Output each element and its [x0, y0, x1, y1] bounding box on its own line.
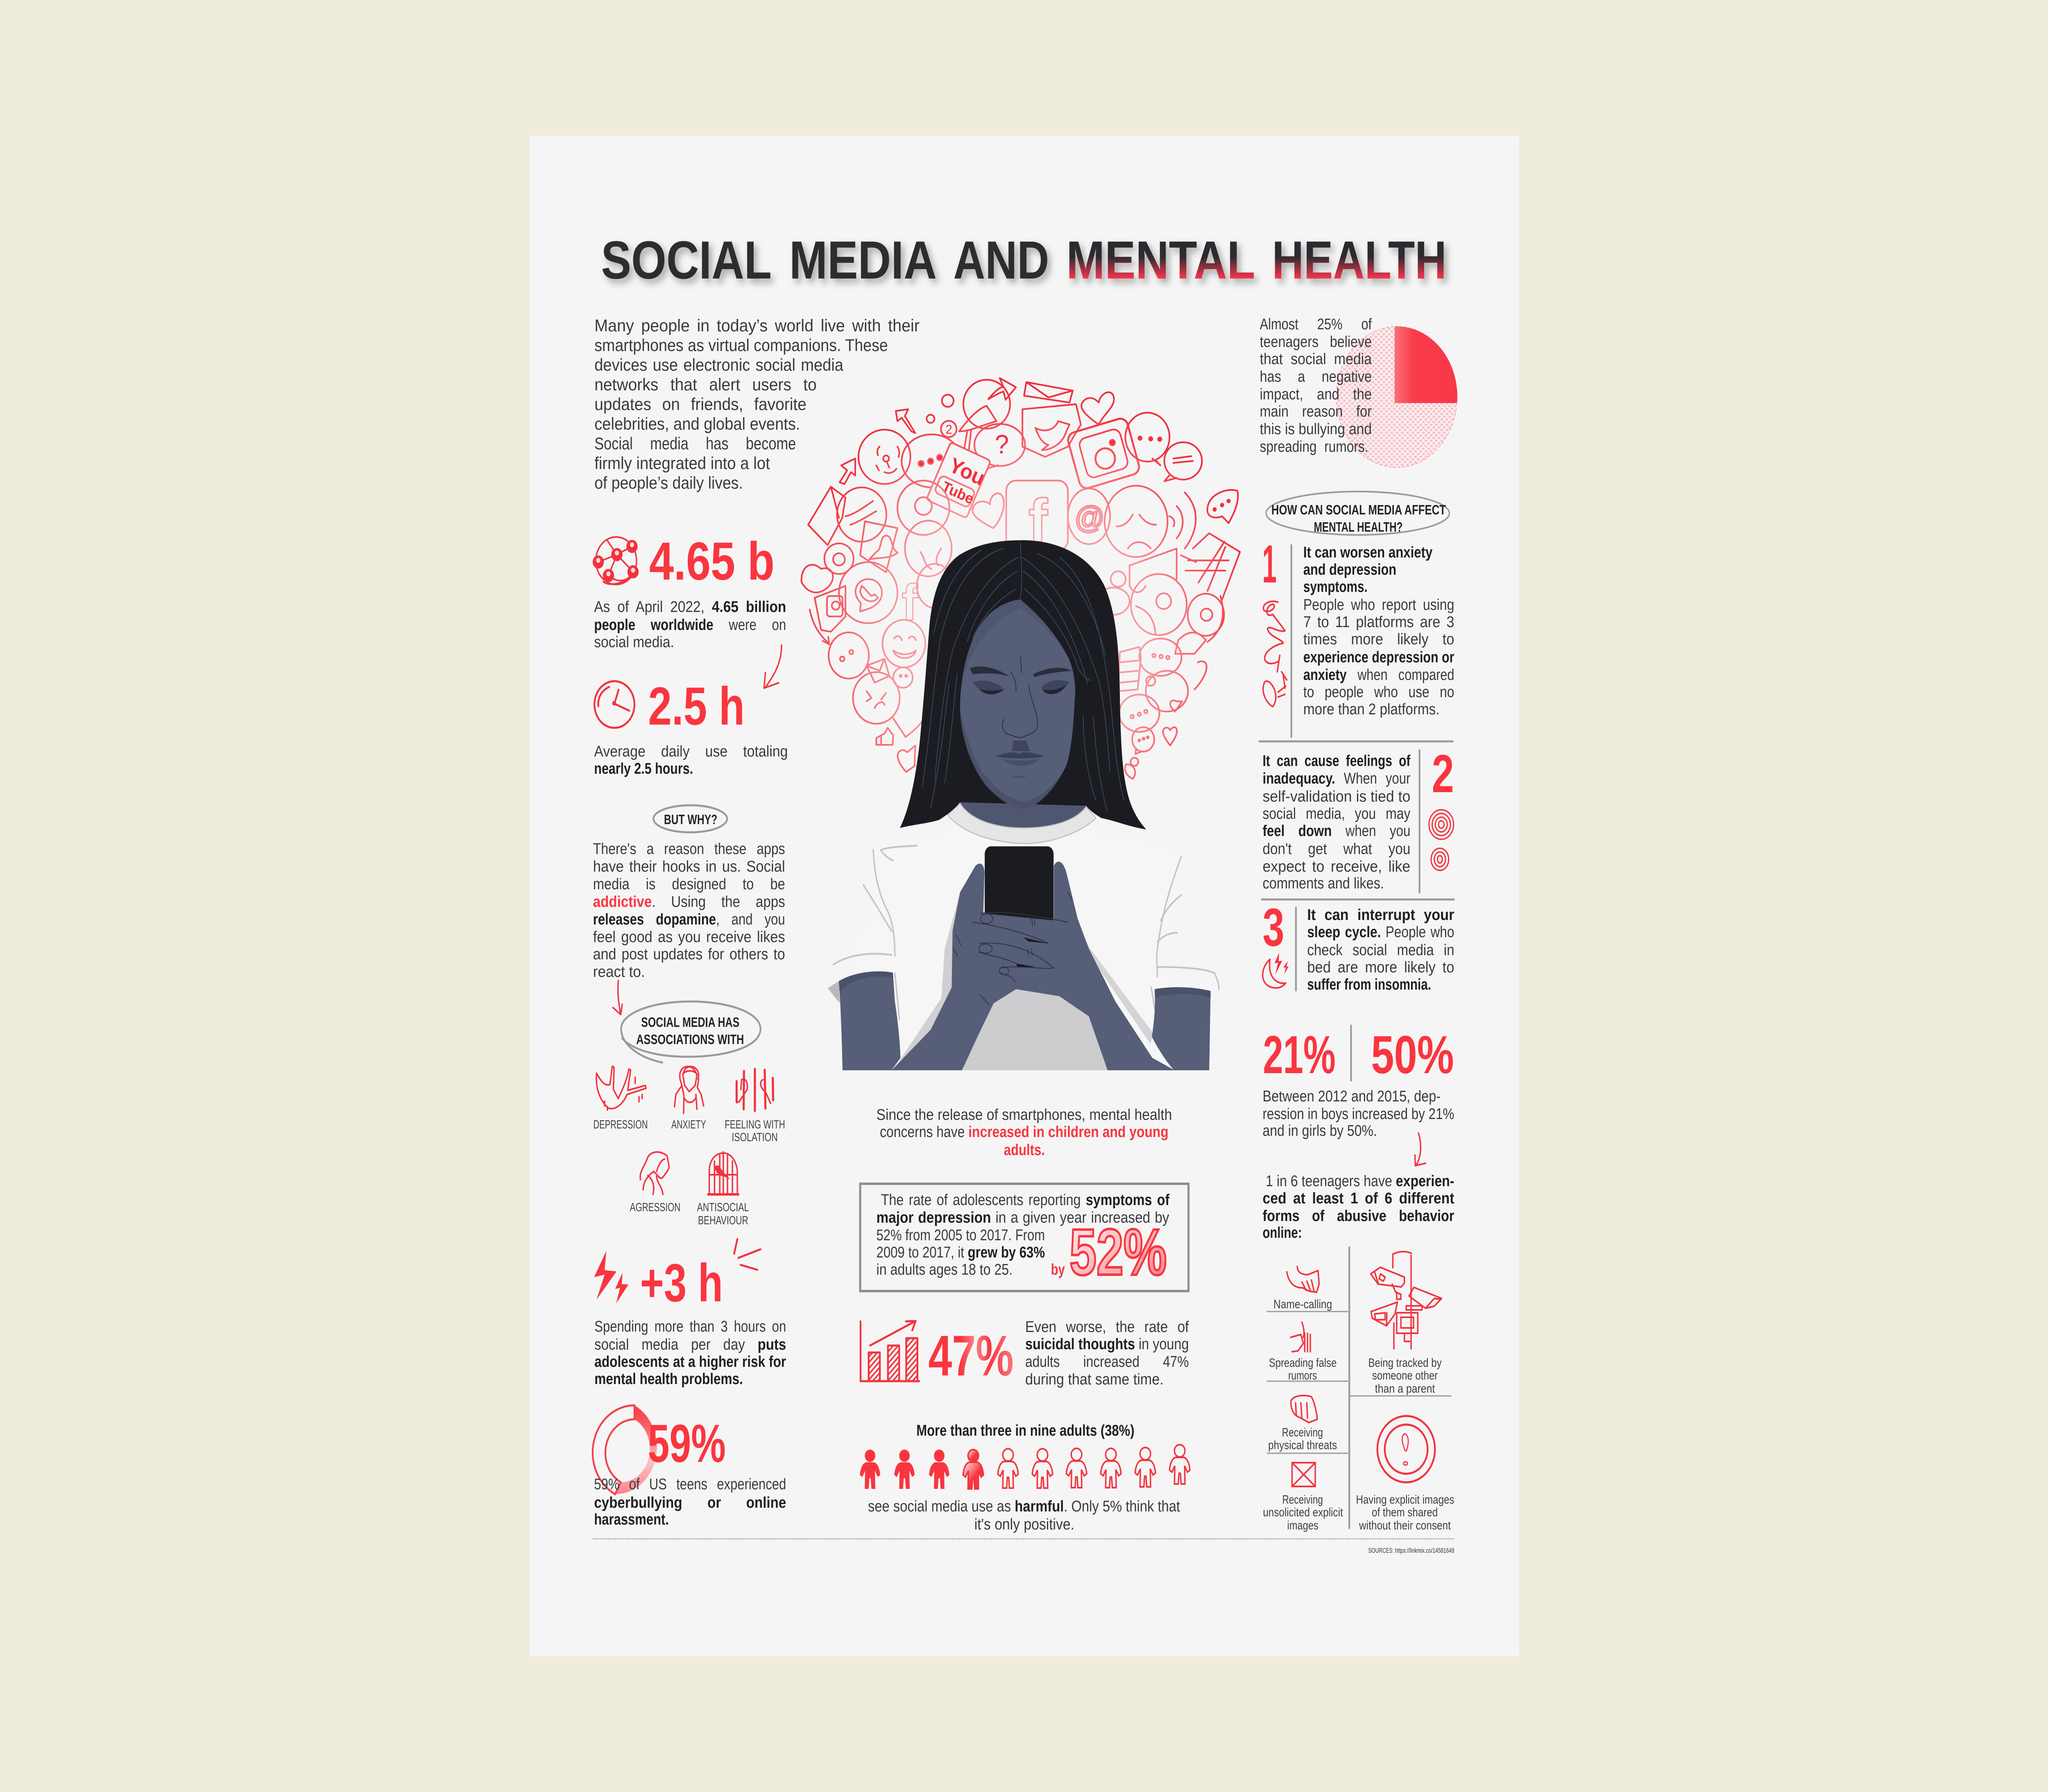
neck: [960, 769, 1086, 828]
text: addictive apps: There's a reason these apps: [593, 840, 785, 858]
icon: clock: [594, 681, 634, 728]
icon: scribble: [1263, 601, 1287, 707]
point 1: [1262, 534, 1454, 737]
callout: associations: [621, 1001, 761, 1063]
pictogram: three in nine adults: [860, 1422, 1190, 1533]
people icons: [860, 1445, 1190, 1489]
eyebrows: [970, 666, 1072, 677]
callout: associations: SOCIAL MEDIA HAS: [641, 1015, 739, 1030]
label: Spreading false: [1269, 1356, 1337, 1369]
icon: birdcage: [708, 1152, 739, 1194]
text: addictive apps: have their hooks in us. Social: [593, 858, 785, 875]
text: 1 in 6 teenagers: ced at least 1 of 6 different: [1262, 1190, 1454, 1207]
icon: rising bar chart: [861, 1321, 919, 1381]
stat: 47%: [861, 1319, 1189, 1388]
labels: AGRESSION: [630, 1201, 680, 1214]
icon: moon and bolts: [1263, 953, 1289, 988]
description: during that same time.: [1025, 1371, 1164, 1388]
text: 25% teenagers: has a negative: [1260, 368, 1372, 385]
shirt folds: [833, 846, 1219, 1019]
description: Average daily use totaling: [594, 743, 788, 760]
description: harassment.: [594, 1511, 669, 1528]
number: 3: [1262, 897, 1285, 957]
arrow: down to abuse text: [1415, 1133, 1425, 1166]
stat: 2.5 h: [594, 676, 788, 777]
description: cyberbullying or online: [594, 1494, 786, 1511]
stat: 4.65 b: [594, 531, 786, 651]
description: [594, 598, 786, 651]
label: ISOLATION: [732, 1130, 778, 1144]
caption: it's only positive.: [974, 1516, 1074, 1533]
label: physical threats: [1268, 1438, 1337, 1452]
panel: 52% depression box: [860, 1184, 1189, 1291]
shirt shadow: left sleeve: [828, 981, 840, 1003]
donut chart: [593, 1405, 657, 1494]
doodle cloud of social media icons: f: [902, 574, 918, 631]
title: HEALTH: [1272, 230, 1447, 290]
description: Between 2012 and 2015, dep-: [1262, 1088, 1441, 1105]
illustration: girl looking at phone: [828, 540, 1219, 1070]
text: 25% teenagers: main reason for: [1260, 403, 1372, 420]
text: since release of smartphones: concerns have increased in children and young: [880, 1124, 1169, 1141]
labels: BEHAVIOUR: [698, 1214, 748, 1227]
stat: 21% and 50%: 21%: [1263, 1025, 1336, 1085]
description: people worldwide were on: [594, 616, 786, 634]
callout: associations: ASSOCIATIONS WITH: [636, 1032, 744, 1047]
label: FEELING WITH: [725, 1118, 785, 1131]
description: [1025, 1319, 1189, 1388]
icon: aggression profile: [640, 1152, 669, 1194]
box text: The rate of adolescents reporting symptoms of: [881, 1192, 1170, 1209]
number: 2: [1432, 744, 1454, 804]
stat: 21% and 50%: 50%: [1371, 1025, 1454, 1085]
caption: see social media use as harmful. Only 5% think that: [868, 1498, 1180, 1515]
label: ANXIETY: [671, 1118, 706, 1131]
doodle cloud of social media icons: You: [946, 453, 988, 490]
big number: 47%: [928, 1323, 1014, 1388]
intro text: networks that alert users to: [594, 375, 817, 394]
description: As of April 2022, 4.65 billion: [594, 598, 786, 616]
panel: 52% depression box: 52%: [1069, 1215, 1167, 1289]
shirt centre shadow: [963, 980, 1108, 1070]
box text: in adults ages 18 to 25.: [877, 1261, 1013, 1278]
description: [594, 743, 788, 777]
label: rumors: [1288, 1368, 1317, 1382]
callout: how can social media affect: [1266, 492, 1449, 535]
title: MEDIA: [789, 230, 937, 290]
title: AND: [953, 230, 1049, 290]
hands: [892, 862, 1175, 1070]
label: [1268, 1425, 1337, 1452]
description: [594, 1476, 786, 1528]
callout: how can social media affect: HOW CAN SOCIAL MEDIA AFFECT: [1271, 502, 1446, 518]
labels: ANTISOCIAL: [697, 1201, 749, 1214]
text: 1 in 6 teenagers: forms of abusive behavior: [1262, 1208, 1454, 1225]
text: [1303, 544, 1454, 718]
hair strands: [922, 543, 1124, 811]
text: addictive apps: feel good as you receive likes: [593, 929, 785, 946]
number: 1: [1262, 534, 1277, 594]
panel: forms of abuse: [1263, 1247, 1454, 1532]
text: 25% teenagers: Almost 25% of: [1260, 316, 1372, 333]
mouth: [1012, 741, 1030, 751]
text: 1 in 6 teenagers: 1 in 6 teenagers have experien-: [1266, 1173, 1454, 1190]
description: nearly 2.5 hours.: [594, 760, 693, 777]
caption: [868, 1498, 1180, 1533]
label: Being tracked by: [1368, 1356, 1442, 1369]
text: [1307, 906, 1454, 993]
intro text: updates on friends, favorite: [594, 395, 807, 414]
description: Spending more than 3 hours on: [594, 1318, 786, 1335]
intro text: [594, 316, 920, 493]
callout: but why: BUT WHY?: [664, 812, 717, 827]
text: since release of smartphones: [877, 1106, 1172, 1159]
description: ression in boys increased by 21%: [1262, 1106, 1454, 1123]
doodle cloud of social media icons: Tube: [940, 478, 976, 507]
intro text: celebrities, and global events.: [594, 415, 800, 434]
arrow: sketch down-left: [764, 645, 782, 688]
text: addictive apps: releases dopamine, and you: [593, 911, 785, 928]
icon: spirals: [1429, 810, 1454, 870]
stat: +3 h: [594, 1239, 786, 1388]
phone: [985, 846, 1053, 931]
text: It can worsen anxiety: [1303, 544, 1433, 561]
box text: [877, 1192, 1170, 1278]
icon: warning circle: [1377, 1416, 1435, 1482]
description: and in girls by 50%.: [1262, 1122, 1377, 1140]
text: bed are more likely to: [1307, 959, 1454, 976]
label: Receiving: [1282, 1493, 1323, 1506]
text: check social media in: [1307, 942, 1454, 959]
pie chart: [1336, 326, 1457, 467]
intro text: firmly integrated into a lot: [594, 454, 770, 473]
text: addictive apps: and post updates for others to: [593, 946, 785, 963]
label: DEPRESSION: [594, 1118, 648, 1131]
label: Receiving: [1282, 1425, 1323, 1439]
doodle cloud of social media icons: f: [1028, 487, 1048, 555]
face: [960, 600, 1075, 809]
text: 25% teenagers: [1260, 316, 1372, 455]
label: of them shared: [1372, 1505, 1438, 1519]
icon: lightning bolts: [594, 1251, 628, 1303]
text: comments and likes.: [1262, 875, 1384, 892]
text: social media, you may: [1262, 805, 1411, 822]
text: 1 in 6 teenagers: [1262, 1173, 1454, 1241]
text: 1 in 6 teenagers: online:: [1262, 1224, 1302, 1241]
collar: [947, 803, 1096, 843]
doodle cloud of social media icons: @: [1074, 500, 1105, 535]
arm: left: [839, 972, 900, 1070]
icon: globe network: [594, 537, 638, 584]
box text: 52% from 2005 to 2017. From: [877, 1227, 1045, 1244]
stat: 59%: [593, 1405, 786, 1528]
title: SOCIAL: [601, 230, 772, 290]
text: addictive apps: addictive. Using the apps: [593, 893, 785, 911]
big number: +3 h: [640, 1253, 723, 1313]
text: symptoms.: [1303, 578, 1368, 596]
label: [725, 1118, 785, 1144]
callout: but why: [653, 805, 727, 832]
text: and depression: [1303, 561, 1396, 578]
label: than a parent: [1375, 1382, 1435, 1395]
description: adolescents at a higher risk for: [594, 1353, 786, 1371]
text: It can cause feelings of: [1262, 752, 1411, 770]
arrow: down to associations: [613, 981, 622, 1015]
poster paper: [530, 136, 1519, 1656]
icon: fist: [1291, 1396, 1317, 1423]
text: 25% teenagers: this is bullying and: [1260, 421, 1372, 438]
arm: right: [1152, 987, 1211, 1070]
text: inadequacy. When your: [1262, 770, 1411, 787]
text: to people who use no: [1303, 684, 1454, 701]
icon: whispering mouth: [1291, 1322, 1310, 1352]
box text: major depression in a given year increased by: [877, 1209, 1169, 1226]
description: [1262, 1088, 1454, 1140]
title: [601, 230, 1447, 290]
eyes: [973, 680, 1069, 694]
text: experience depression or: [1303, 649, 1454, 666]
doodle cloud of social media icons: ?: [995, 430, 1009, 459]
text: anxiety when compared: [1303, 666, 1454, 684]
icon: crossed image: [1292, 1463, 1315, 1486]
label: someone other: [1372, 1368, 1438, 1382]
big number: 4.65 b: [649, 531, 775, 591]
point 3: [1262, 897, 1454, 993]
intro text: Many people in today’s world live with their: [594, 316, 920, 335]
description: suicidal thoughts in young: [1025, 1336, 1189, 1353]
text: sleep cycle. People who: [1307, 924, 1454, 941]
text: People who report using: [1303, 596, 1454, 614]
description: social media.: [594, 634, 674, 651]
text: don't get what you: [1262, 840, 1410, 858]
label: [1368, 1356, 1442, 1395]
icon: anxiety head: [675, 1067, 704, 1113]
point 2: [1262, 744, 1454, 893]
stat: 21% and 50%: [1262, 1025, 1454, 1140]
heading: More than three in nine adults (38%): [916, 1422, 1135, 1439]
icon: isolation bars: [736, 1069, 773, 1111]
text: 25% teenagers: spreading rumors.: [1260, 438, 1368, 455]
big number: by: [1051, 1261, 1065, 1278]
text: [1262, 752, 1411, 892]
label: unsolicited explicit: [1263, 1505, 1343, 1519]
description: mental health problems.: [594, 1371, 743, 1388]
big number: 59%: [648, 1414, 726, 1473]
title: MENTAL: [1066, 230, 1255, 290]
description: social media per day puts: [594, 1336, 786, 1353]
intro text: devices use electronic social media: [594, 356, 843, 375]
doodle cloud of social media icons: 2: [945, 422, 952, 437]
text: It can interrupt your: [1307, 906, 1454, 924]
text: 25% teenagers: teenagers believe: [1260, 333, 1372, 351]
labels: [630, 1201, 749, 1227]
description: Even worse, the rate of: [1025, 1319, 1189, 1336]
description: [594, 1318, 786, 1388]
label: [1263, 1493, 1343, 1532]
description: 59% of US teens experienced: [594, 1476, 786, 1493]
text: self-validation is tied to: [1262, 788, 1410, 805]
text: times more likely to: [1303, 631, 1454, 648]
text: addictive apps: media is designed to be: [593, 876, 785, 893]
label: images: [1287, 1518, 1319, 1532]
spark lines: [734, 1239, 761, 1270]
doodle cloud of social media icons: [802, 378, 1240, 779]
nose: [1002, 657, 1038, 738]
text: suffer from insomnia.: [1307, 976, 1431, 993]
text: feel down when you: [1262, 822, 1410, 840]
sources: SOURCES: https://linkmix.co/14581649: [1368, 1547, 1454, 1554]
label: [1356, 1493, 1454, 1532]
text: 25% teenagers: impact, and the: [1260, 386, 1372, 403]
big number: 2.5 h: [648, 676, 745, 736]
callout: how can social media affect: MENTAL HEALTH?: [1314, 519, 1402, 535]
text: since release of smartphones: Since the release of smartphones, mental health: [877, 1106, 1172, 1124]
icon: surveillance cameras: [1371, 1252, 1442, 1349]
intro text: Social media has become: [594, 434, 796, 453]
label: [1269, 1356, 1337, 1382]
text: 7 to 11 platforms are 3: [1303, 614, 1454, 631]
label: Name-calling: [1273, 1297, 1332, 1311]
hair: [900, 540, 1146, 829]
text: addictive apps: [593, 840, 785, 981]
text: 25% teenagers: that social media: [1260, 351, 1372, 368]
icon: depression falling figure: [596, 1066, 646, 1110]
text: expect to receive, like: [1262, 858, 1410, 875]
text: more than 2 platforms.: [1303, 701, 1439, 718]
shirt: [833, 828, 1211, 1070]
icon: pointing hand: [1287, 1266, 1319, 1292]
intro text: smartphones as virtual companions. These: [594, 336, 888, 355]
text: addictive apps: react to.: [593, 963, 645, 981]
label: Having explicit images: [1356, 1493, 1454, 1506]
intro text: of people’s daily lives.: [594, 473, 743, 493]
text: since release of smartphones: adults.: [1004, 1142, 1045, 1159]
box text: 2009 to 2017, it grew by 63%: [877, 1244, 1045, 1261]
description: adults increased 47%: [1025, 1353, 1189, 1371]
label: without their consent: [1359, 1518, 1451, 1532]
